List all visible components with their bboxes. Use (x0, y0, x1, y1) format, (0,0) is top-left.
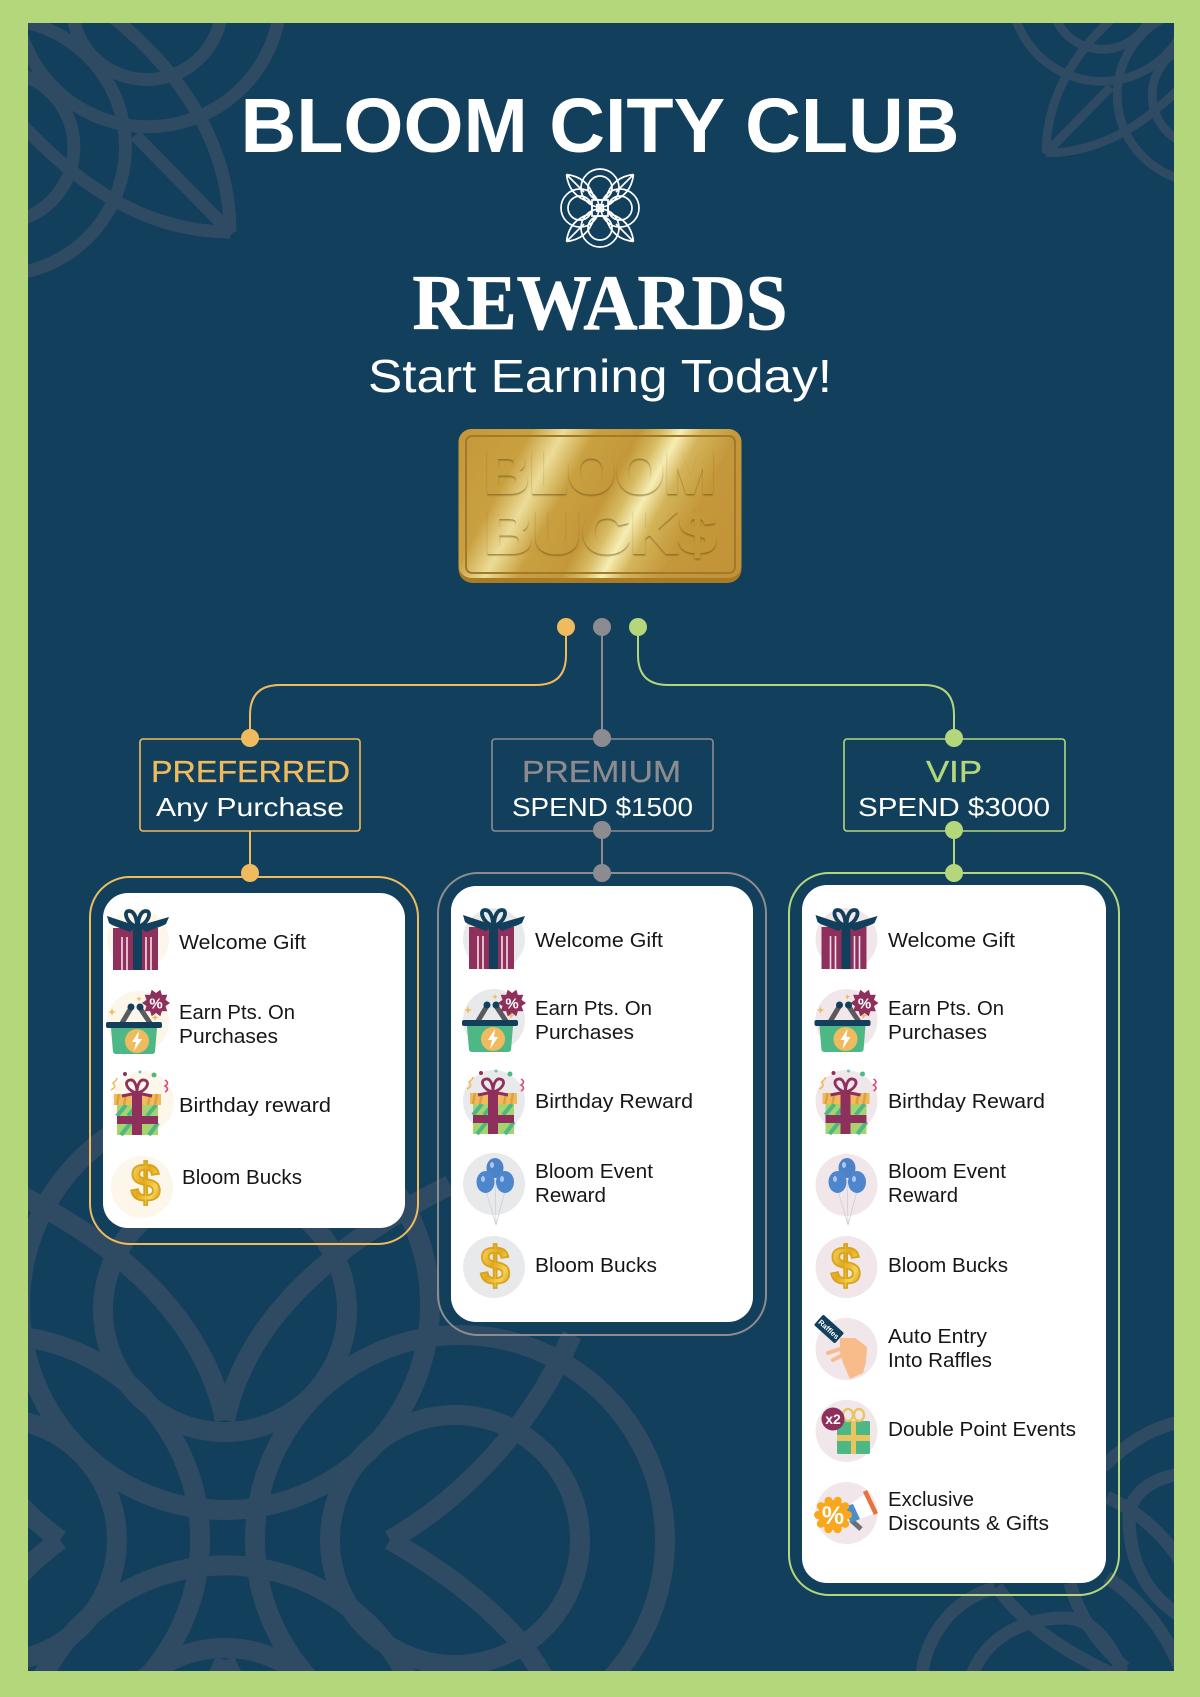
row: earn points (462, 989, 652, 1052)
title: BLOOM CITY CLUB (240, 83, 960, 169)
row: bloom event reward (816, 1154, 1006, 1225)
white card (103, 893, 405, 1228)
row: bloom bucks: Bloom Bucks (535, 1254, 657, 1277)
row: double point events: x2 (825, 1411, 841, 1427)
row: bloom event reward: Bloom Event (535, 1160, 653, 1183)
row: bloom bucks: Bloom Bucks (182, 1166, 302, 1189)
row: welcome gift: Welcome Gift (179, 931, 306, 954)
row: earn points: Purchases (888, 1021, 987, 1044)
heading: rewards: REWARDS (412, 259, 788, 346)
row: welcome gift (463, 908, 663, 970)
tier box: premium: SPEND $1500 (512, 792, 693, 822)
row: earn points: Earn Pts. On (179, 1001, 295, 1024)
row: earn points: Earn Pts. On (888, 997, 1004, 1020)
row: bloom bucks (463, 1236, 657, 1298)
row: earn points (814, 989, 1004, 1052)
row: welcome gift: Welcome Gift (535, 929, 663, 952)
row: exclusive discounts and gifts: Discounts & Gifts (888, 1512, 1049, 1535)
row: exclusive discounts and gifts (816, 1482, 1049, 1544)
tier box: preferred: Any Purchase (156, 792, 344, 822)
row: birthday reward: Birthday Reward (888, 1090, 1045, 1113)
outline card (789, 873, 1119, 1595)
badge: bloom bucks gold plate: BLOOM (484, 439, 716, 506)
outline card (438, 873, 766, 1335)
connector: vip (638, 627, 954, 738)
row: double point events: Double Point Events (888, 1418, 1076, 1441)
row: bloom bucks (111, 1153, 302, 1218)
white card (802, 885, 1106, 1583)
panel: premium tier (438, 729, 766, 1335)
row: bloom bucks (816, 1236, 1008, 1298)
row: bloom bucks: $ (480, 1236, 510, 1296)
row: bloom event reward: Reward (888, 1184, 958, 1207)
row: birthday reward: Birthday Reward (535, 1090, 693, 1113)
badge: bloom bucks gold plate (458, 429, 742, 583)
tier box: premium (492, 739, 713, 831)
row: earn points: Earn Pts. On (535, 997, 652, 1020)
tier box: vip: VIP (926, 754, 982, 789)
row: bloom bucks: $ (130, 1153, 161, 1213)
tier box: vip (844, 739, 1065, 831)
row: double point events (816, 1400, 1076, 1462)
row: birthday reward (463, 1070, 693, 1134)
badge: bloom bucks gold plate: BUCK$ (484, 499, 716, 566)
subtitle: Start Earning Today! (368, 350, 832, 402)
tier box: vip: SPEND $3000 (858, 792, 1050, 822)
row: earn points: % (858, 996, 871, 1012)
row: birthday reward: Birthday reward (179, 1094, 331, 1117)
panel: preferred tier (90, 729, 418, 1244)
row: earn points: Purchases (179, 1025, 278, 1048)
row: earn points: % (149, 996, 163, 1012)
icon: flower logo (561, 169, 639, 247)
dots: start nodes (557, 618, 647, 636)
tier box: premium: PREMIUM (522, 754, 681, 789)
row: auto entry into raffles (814, 1314, 992, 1380)
row: welcome gift (816, 908, 1015, 970)
row: auto entry into raffles: Raffles (816, 1318, 841, 1341)
row: auto entry into raffles: Into Raffles (888, 1349, 992, 1372)
row: exclusive discounts and gifts: Exclusive (888, 1488, 974, 1511)
panel: vip tier (789, 729, 1119, 1595)
white card (451, 886, 753, 1322)
row: bloom event reward: Bloom Event (888, 1160, 1006, 1183)
row: auto entry into raffles: Auto Entry (888, 1325, 988, 1348)
row: birthday reward (816, 1070, 1045, 1134)
tier box: preferred (140, 739, 360, 831)
row: welcome gift (107, 909, 306, 971)
row: earn points: % (505, 996, 519, 1012)
connector: premium (601, 627, 603, 738)
row: bloom bucks: $ (830, 1236, 861, 1296)
row: earn points: Purchases (535, 1021, 634, 1044)
connector: preferred (250, 627, 566, 738)
row: birthday reward (111, 1070, 331, 1135)
outline card (90, 877, 418, 1244)
row: exclusive discounts and gifts: % (822, 1502, 844, 1530)
tier box: preferred: PREFERRED (151, 754, 350, 789)
row: bloom event reward: Reward (535, 1184, 606, 1207)
row: bloom event reward (463, 1153, 653, 1225)
row: earn points (106, 990, 295, 1054)
row: bloom bucks: Bloom Bucks (888, 1254, 1008, 1277)
row: welcome gift: Welcome Gift (888, 929, 1015, 952)
